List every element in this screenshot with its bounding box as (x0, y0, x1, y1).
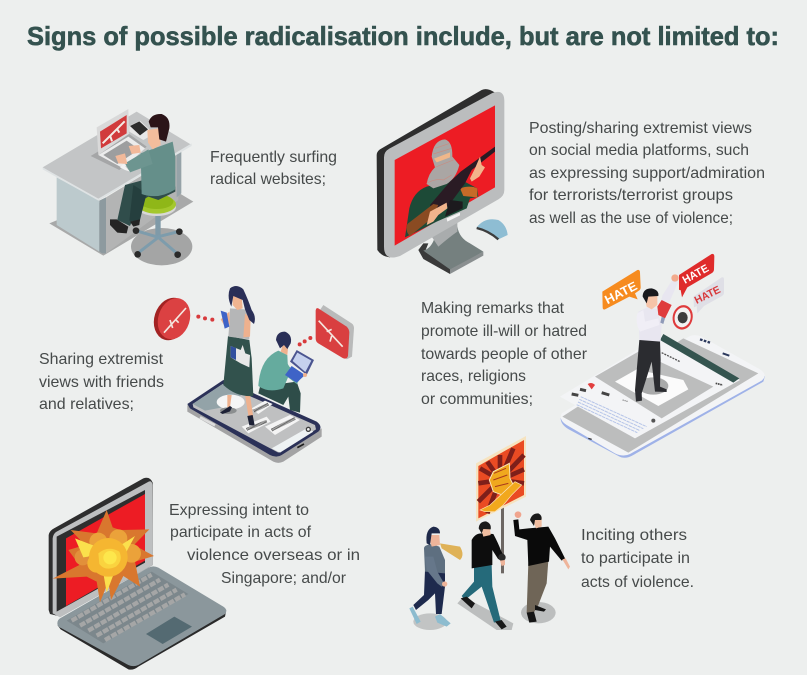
extremist figure (405, 139, 495, 237)
text: posting or sharing extremist views: for terrorists/terrorist groups (529, 187, 733, 204)
text: remarks promoting ill-will: Making remarks that (421, 300, 565, 317)
text: expressing intent to participate: Singapore; and/or (221, 570, 347, 587)
speech bubble: orange hate (602, 270, 641, 309)
speech bubble: grey hate: HATE (693, 284, 723, 307)
text: expressing intent to participate: Expressing intent to (169, 502, 309, 519)
speech bubble: red hate (679, 254, 714, 297)
text: remarks promoting ill-will (421, 300, 588, 408)
woman with megaphone (409, 527, 462, 627)
icon: group marching with protest placard (409, 436, 570, 630)
icon: two people on a phone sharing views (148, 286, 354, 463)
man raising fist (513, 511, 570, 623)
placard (476, 436, 526, 573)
speech bubble: red hate: HATE (681, 263, 711, 287)
text: remarks promoting ill-will: races, religions (421, 368, 526, 385)
icon: person at desk surfing websites (43, 109, 193, 265)
man holding placard (461, 521, 507, 629)
text: expressing intent to participate (169, 502, 360, 587)
explosion (53, 510, 154, 602)
red gun badge circle (148, 293, 195, 345)
text: inciting others to participate: to participate in (581, 550, 690, 567)
woman (220, 286, 255, 425)
text: remarks promoting ill-will: or communities; (421, 391, 533, 408)
text: expressing intent to participate: violence overseas or in (187, 547, 360, 564)
icon: laptop with explosion on screen (49, 478, 226, 670)
text: sharing extremist views with friends (39, 351, 164, 413)
title: Signs of possible radicalisation include, but are not limited to: (27, 21, 779, 51)
text: remarks promoting ill-will: promote ill-will or hatred (421, 323, 587, 340)
text: frequently surfing radical websites (210, 149, 337, 188)
speech bubble: orange hate: HATE (602, 279, 640, 307)
icon: computer mouse (477, 219, 508, 239)
text: posting or sharing extremist views: as expressing support/admiration (529, 165, 765, 182)
icon: desktop monitor showing armed extremist (377, 89, 508, 274)
text: posting or sharing extremist views (529, 120, 765, 227)
text: inciting others to participate (581, 527, 694, 591)
text: expressing intent to participate: participate in acts of (170, 524, 312, 541)
icon: man with megaphone on phone shouting hate (560, 254, 765, 458)
man with megaphone (635, 274, 695, 402)
text: inciting others to participate: Inciting others (581, 527, 687, 544)
text: frequently surfing radical websites: radical websites; (210, 171, 326, 188)
text: sharing extremist views with friends: views with friends (39, 374, 164, 391)
text: posting or sharing extremist views: on social media platforms, such (529, 142, 749, 159)
red gun badge square (316, 305, 354, 359)
text: sharing extremist views with friends: and relatives; (39, 396, 134, 413)
text: posting or sharing extremist views: Posting/sharing extremist views (529, 120, 752, 137)
man (258, 332, 314, 413)
text: posting or sharing extremist views: as well as the use of violence; (529, 210, 733, 227)
text: remarks promoting ill-will: towards people of other (421, 346, 588, 363)
text: frequently surfing radical websites: Frequently surfing (210, 149, 337, 166)
speech bubble: grey hate (693, 277, 724, 313)
text: sharing extremist views with friends: Sharing extremist (39, 351, 164, 368)
text: inciting others to participate: acts of violence. (581, 574, 694, 591)
